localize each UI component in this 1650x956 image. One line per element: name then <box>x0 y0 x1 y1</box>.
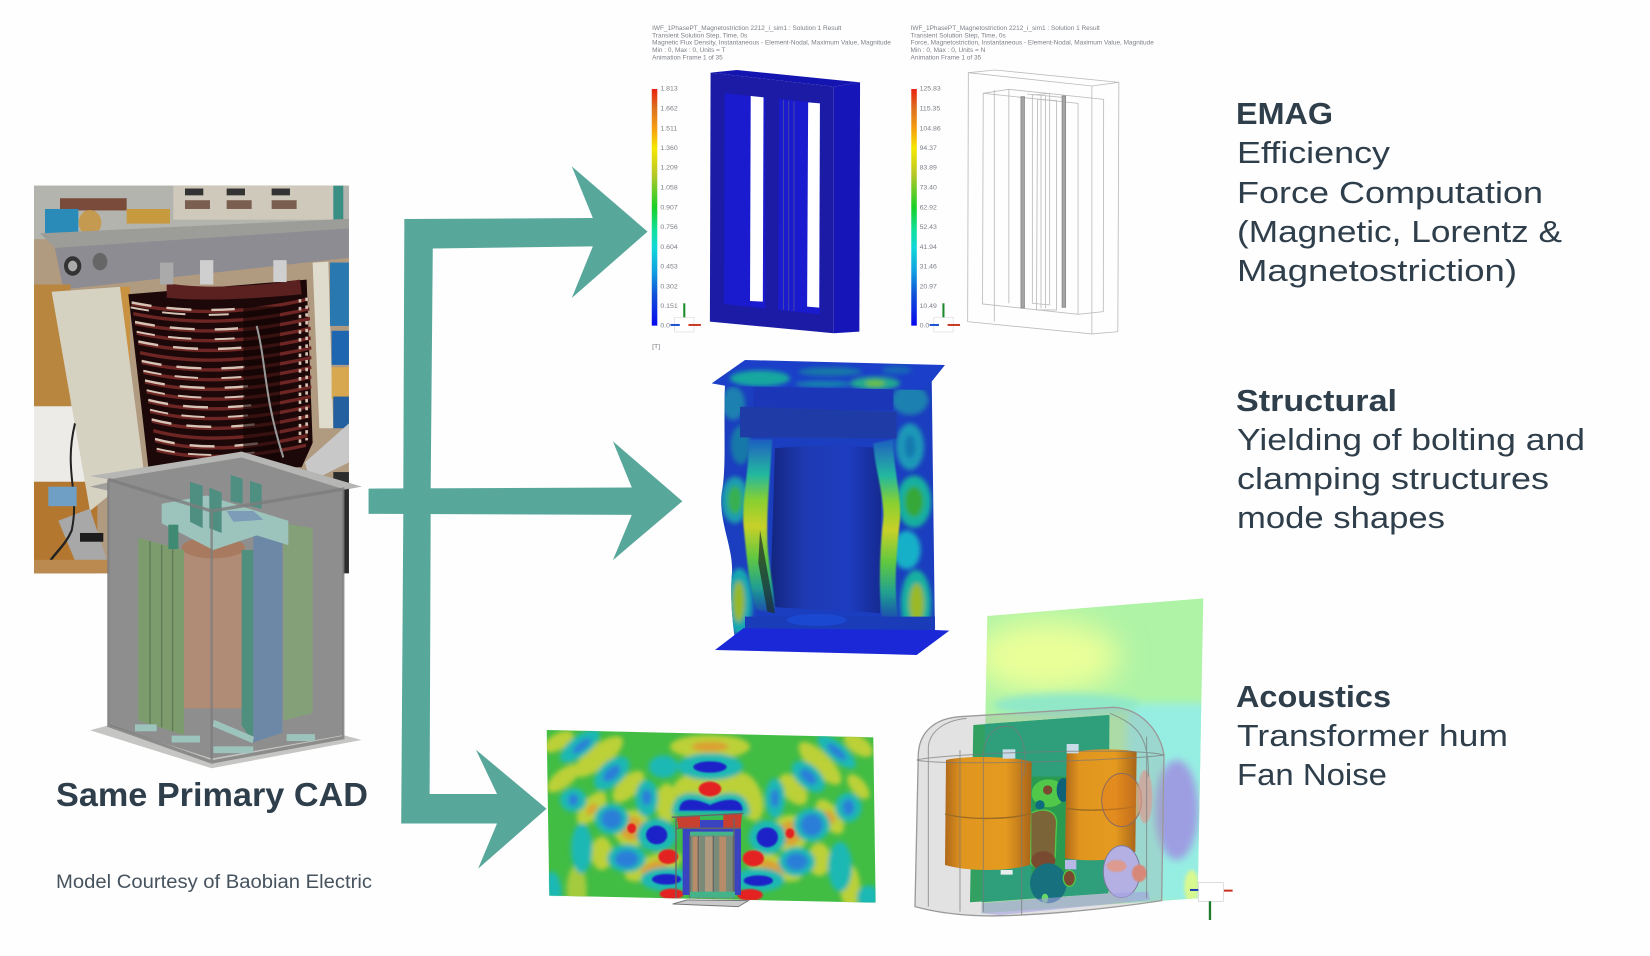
force header text: Min : 0, Max : 0, Units = N <box>911 47 985 54</box>
acoustic triad <box>1190 883 1233 920</box>
flux header text: Animation Frame 1 of 35 <box>652 54 723 61</box>
force scale labels <box>920 86 941 330</box>
flux scale labels: 0.907 <box>660 204 678 211</box>
panel: acoustic pressure plane <box>540 723 880 915</box>
acoustic core contours <box>1030 777 1075 903</box>
text block: EMAG: Magnetostriction) <box>1237 253 1517 288</box>
text block: EMAG: EMAG <box>1236 96 1333 131</box>
panel: acoustic field around transformer <box>915 598 1233 920</box>
CAD base clamp <box>135 723 315 750</box>
arrow: to EMAG <box>403 166 648 489</box>
force scale labels: 52.43 <box>920 224 937 231</box>
CAD right windings <box>283 523 313 721</box>
arrow: to acoustics <box>401 514 547 869</box>
acoustic lower right field <box>982 770 1152 915</box>
flux header text <box>652 25 891 61</box>
force header text: Transient Solution Step, Time, 0s <box>911 32 1006 39</box>
CAD top plate <box>90 452 362 513</box>
magnetic core <box>710 70 860 333</box>
force scale labels: 41.94 <box>920 244 937 251</box>
text block: EMAG: (Magnetic, Lorentz & <box>1237 214 1562 249</box>
flux scale labels: 0.453 <box>660 264 678 271</box>
text block: Structural <box>1236 383 1585 535</box>
structural core cylinder <box>770 446 882 613</box>
flux scale labels: 0.151 <box>660 303 678 310</box>
flux scale labels: 0.756 <box>660 224 678 231</box>
force scale labels: 31.46 <box>920 264 937 271</box>
acoustic left coil <box>945 757 1032 870</box>
flux scale labels: 1.511 <box>660 125 677 132</box>
text block: Acoustics: Acoustics <box>1236 679 1391 714</box>
flux scale labels: 0.604 <box>660 244 678 251</box>
text block: EMAG: Efficiency <box>1237 135 1391 170</box>
flux scale labels: 1.662 <box>660 105 678 112</box>
caption: same primary CAD: Same Primary CAD <box>56 776 368 813</box>
force scale labels: 20.97 <box>920 283 937 290</box>
force scale labels: 62.92 <box>920 204 937 211</box>
winding block <box>128 280 313 467</box>
flux header text: Min : 0, Max : 0, Units = T <box>652 47 725 54</box>
force scale labels: 115.35 <box>920 105 940 112</box>
panel: structural mode shape <box>712 360 949 655</box>
flux scale labels: 1.209 <box>660 165 678 172</box>
CAD edges <box>108 479 343 762</box>
flux scale labels: 0.302 <box>660 283 678 290</box>
text block: EMAG: Force Computation <box>1237 175 1543 210</box>
force scale labels: 94.37 <box>920 145 937 152</box>
flux scale labels: 1.058 <box>660 185 678 192</box>
text block: Structural: Structural <box>1236 383 1397 418</box>
force scale labels: 104.86 <box>920 125 941 132</box>
text block: Acoustics: Transformer hum <box>1237 718 1508 753</box>
force header text: Animation Frame 1 of 35 <box>911 54 981 61</box>
structural left clamp <box>743 439 775 613</box>
structural enclosure <box>721 373 935 640</box>
force scale labels: 0.0 <box>920 323 929 330</box>
CAD terminals <box>190 475 262 533</box>
structural upper clamp <box>753 387 893 410</box>
acoustic core <box>970 715 1109 902</box>
structural bottom plate <box>745 617 935 633</box>
acoustic enclosure edges <box>917 713 1164 915</box>
flux scale labels <box>652 86 678 350</box>
force scale labels: 10.49 <box>920 303 937 310</box>
arrows: teal workflow arrows <box>369 166 682 869</box>
flux header text: Transient Solution Step, Time, 0s <box>652 32 748 39</box>
force triad <box>930 303 960 332</box>
CAD coil <box>184 550 243 708</box>
text block: Structural: clamping structures <box>1237 461 1549 496</box>
structural right clamp <box>873 439 900 620</box>
flux header text: IWF_1PhasePT_Magnetostriction 2212_i_sim1 : Solution 1 Result <box>652 25 841 32</box>
force header text <box>911 25 1154 61</box>
force header text: Force, Magnetostriction, Instantaneous - Element-Nodal, Maximum Value, Magnitude <box>911 40 1154 47</box>
flux scale labels: [T] <box>652 343 660 350</box>
force header text: IWF_1PhasePT_Magnetostriction 2212_i_sim1 : Solution 1 Result <box>911 25 1100 32</box>
force colour bar <box>911 89 917 326</box>
CAD core limb <box>242 550 253 742</box>
panel: transformer photo <box>34 186 349 573</box>
CAD left windings <box>138 538 184 735</box>
flux scale labels: 0.0 <box>660 323 670 330</box>
force scale labels: 125.83 <box>920 86 941 93</box>
flux triad <box>670 303 701 332</box>
acoustic right coil <box>1065 749 1137 860</box>
text block: Structural: mode shapes <box>1237 500 1445 535</box>
CAD base plate <box>90 725 362 768</box>
flux header text: Magnetic Flux Density, Instantaneous - Element-Nodal, Maximum Value, Magnitude <box>652 40 891 47</box>
wireframe transformer <box>968 70 1119 334</box>
acoustic enclosure <box>915 707 1164 916</box>
text block: Structural: Yielding of bolting and <box>1237 422 1585 457</box>
panel: primary CAD model <box>90 452 362 768</box>
flux scale labels: 1.360 <box>660 145 678 152</box>
structural top plate <box>712 360 945 390</box>
flux colour bar <box>652 89 657 326</box>
structural side panel stress <box>721 385 931 637</box>
force scale labels: 83.89 <box>920 165 937 172</box>
force scale labels: 73.40 <box>920 185 937 192</box>
sound pressure plane <box>982 598 1203 913</box>
text block: EMAG <box>1236 96 1562 288</box>
arrow: to structural <box>369 441 682 560</box>
text block: Acoustics: Fan Noise <box>1237 757 1387 792</box>
panel: EMAG flux density result <box>652 25 1154 350</box>
text block: Acoustics <box>1236 679 1508 792</box>
miniature transformer in pressure plane <box>672 813 748 907</box>
caption: model courtesy: Model Courtesy of Baobian Electric <box>56 872 372 893</box>
flux scale labels: 1.813 <box>660 86 678 93</box>
CAD upper clamp <box>162 495 288 550</box>
pressure contour plate <box>540 723 880 915</box>
